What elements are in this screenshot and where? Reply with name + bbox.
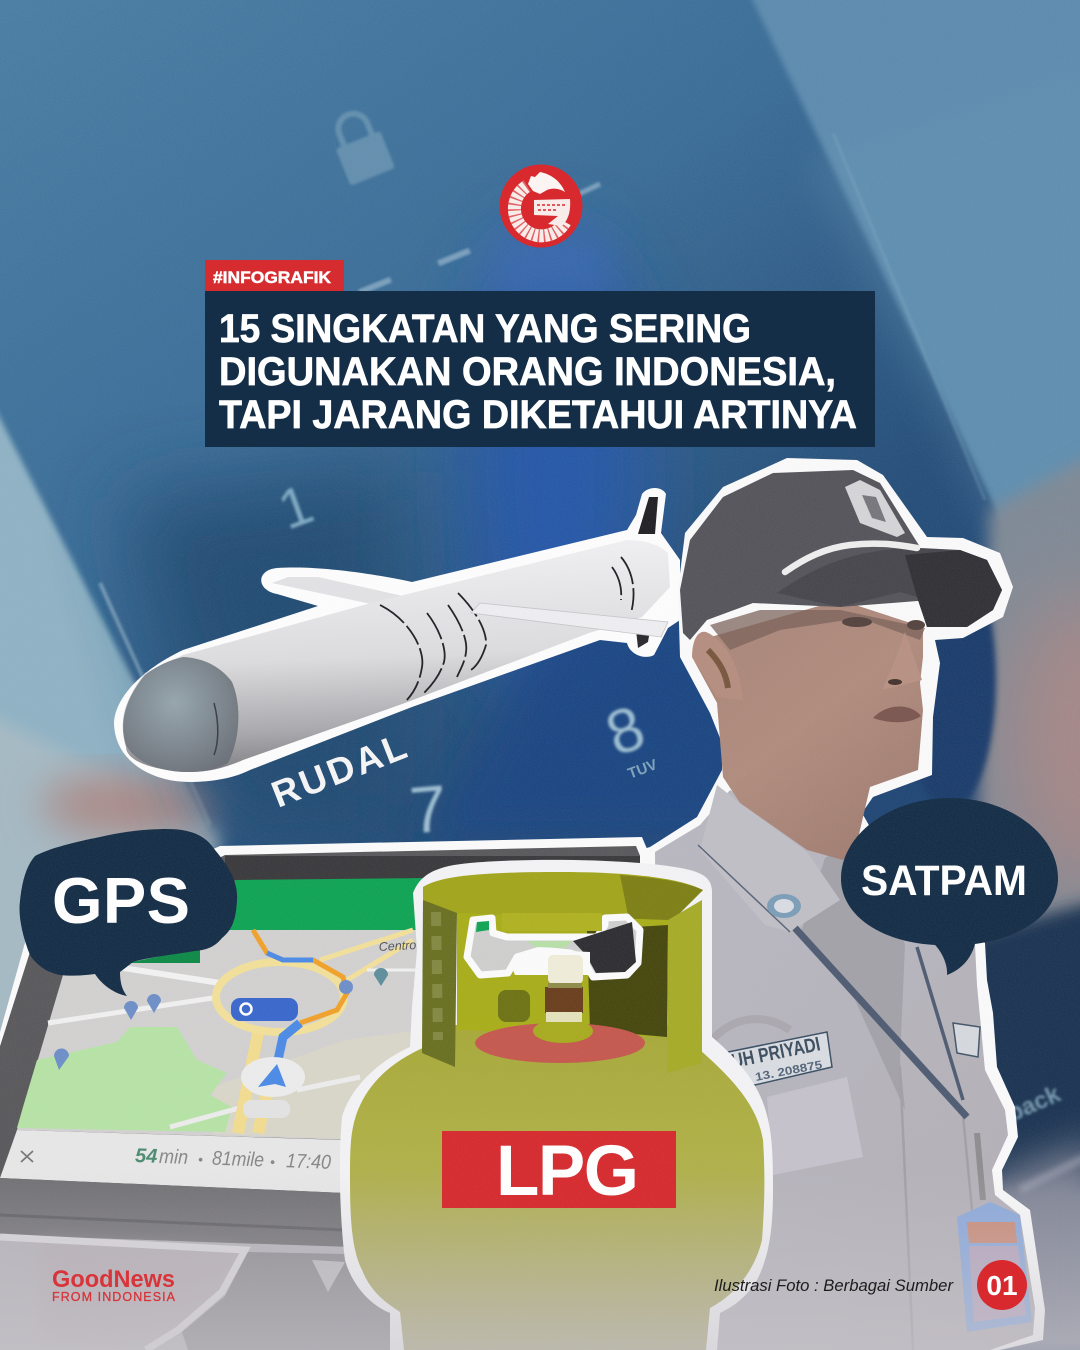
name tag: 13. 208875 <box>754 1059 824 1084</box>
background phone lock icon and keypad digits: 1 <box>270 471 321 541</box>
emblem eagle head <box>528 172 565 194</box>
handle back wall <box>457 913 668 1037</box>
missile tail fin upper <box>638 497 658 534</box>
green navigation banner <box>225 878 430 930</box>
roads <box>123 968 220 983</box>
background phone lock icon and keypad digits <box>270 106 660 847</box>
shoulder patch <box>953 1023 980 1057</box>
cap crown <box>680 470 930 640</box>
shirt shadow by collar <box>800 835 905 1110</box>
mouth <box>873 706 921 722</box>
background phone lock icon and keypad digits: TUV <box>626 756 660 783</box>
eyes <box>842 617 872 627</box>
trip status text: 54 <box>135 1145 158 1168</box>
background phone lock icon and keypad digits: 7 <box>407 771 450 847</box>
neck and face <box>692 600 923 860</box>
title block <box>205 291 875 447</box>
trip status text: min <box>159 1146 188 1169</box>
speech bubble: GPS <box>19 829 237 996</box>
left panel <box>422 900 457 1067</box>
map pins <box>54 980 353 1070</box>
background phone text: back: back <box>1003 1080 1065 1127</box>
missile rear wing <box>272 577 412 604</box>
GoodNews from Indonesia logo: GoodNews <box>52 1266 175 1293</box>
trip status text: 17:40 <box>286 1150 331 1174</box>
cylinder white sticker outline <box>340 860 773 1350</box>
tablet body and frame <box>0 837 660 1250</box>
map label: Centro <box>378 938 417 954</box>
nose <box>882 632 922 690</box>
label: LPG <box>442 1131 676 1211</box>
bottom stand <box>0 1235 440 1350</box>
GoodNews from Indonesia logo: FROM INDONESIA <box>52 1290 176 1304</box>
handle top rim <box>423 872 703 925</box>
tag: #INFOGRAFIK: #INFOGRAFIK <box>213 268 332 287</box>
guard white sticker outline <box>640 458 1045 1350</box>
emblem ring <box>514 186 565 236</box>
close icon <box>21 1151 33 1162</box>
trip status text: • <box>270 1154 275 1170</box>
turn indicator <box>231 998 298 1021</box>
tablet lower bezel <box>0 1178 345 1247</box>
park area <box>17 1027 232 1132</box>
navigation route <box>253 930 347 1023</box>
label: LPG: LPG <box>496 1132 639 1211</box>
tag: #INFOGRAFIK <box>205 260 344 291</box>
photo cutout: car GPS navigation tablet <box>0 837 660 1350</box>
icon: padlock <box>326 106 395 186</box>
cap stripe <box>785 544 917 572</box>
handle cutout window <box>467 917 640 977</box>
title block: 15 SINGKATAN YANG SERING <box>219 307 751 351</box>
shirt placket <box>900 1067 972 1350</box>
GoodNews from Indonesia logo <box>52 1266 176 1304</box>
label: RUDAL: RUDAL <box>266 726 412 815</box>
name tag <box>728 1032 832 1085</box>
chest fold <box>712 1019 790 1040</box>
speech bubble: SATPAM <box>841 798 1058 975</box>
shade under cap <box>710 610 925 650</box>
post shadow <box>498 990 530 1022</box>
photo cutout: cruise missile <box>114 488 680 782</box>
right panel <box>667 900 702 1073</box>
trip status text: 81mile <box>212 1148 264 1171</box>
map screen <box>17 925 420 1142</box>
photo cutout: LPG gas cylinder <box>340 860 773 1350</box>
speech bubble: GPS: GPS <box>52 864 190 937</box>
speech bubble: SATPAM: SATPAM <box>861 857 1027 905</box>
missile white sticker outline <box>114 488 680 782</box>
title block: DIGUNAKAN ORANG INDONESIA, <box>219 350 836 394</box>
name tag: UH PRIYADI <box>730 1033 822 1073</box>
trip status text <box>135 1145 331 1174</box>
logo: GNFI red eagle G emblem <box>500 164 582 248</box>
photo cutout: security guard (satpam) <box>640 458 1045 1350</box>
missile body bands <box>380 557 634 702</box>
bottom fade overlay <box>0 1170 1080 1350</box>
red collar <box>475 1023 645 1063</box>
page number badge: 01 <box>986 1270 1018 1301</box>
ID badge <box>957 1202 1032 1332</box>
valve base <box>533 1019 593 1043</box>
emblem G bar <box>534 199 570 226</box>
missile tail fin lower <box>636 630 650 648</box>
trip status text: • <box>198 1151 203 1167</box>
ear <box>692 632 743 700</box>
lanyard chain <box>977 1133 983 1200</box>
shirt <box>655 790 1035 1350</box>
valve cap <box>548 955 583 984</box>
missile front wing <box>471 603 668 637</box>
missile body <box>123 540 670 772</box>
handle bar <box>502 913 602 931</box>
collar <box>700 785 840 932</box>
pocket flap <box>767 1077 863 1175</box>
valve stem <box>545 987 583 1013</box>
background phone lock icon and keypad digits: 8 <box>598 693 654 770</box>
cap emblem <box>845 480 905 537</box>
cap brim <box>777 548 1002 627</box>
lanyard <box>795 928 967 1117</box>
position marker <box>241 1057 305 1097</box>
photo credit: Ilustrasi Foto : Berbagai Sumber <box>714 1276 954 1295</box>
missile nose cone <box>123 657 238 772</box>
page number badge <box>977 1260 1027 1310</box>
collar badge <box>767 894 801 918</box>
title block: TAPI JARANG DIKETAHUI ARTINYA <box>219 393 857 437</box>
trip status bar <box>0 1130 345 1193</box>
cylinder body <box>350 1025 764 1350</box>
